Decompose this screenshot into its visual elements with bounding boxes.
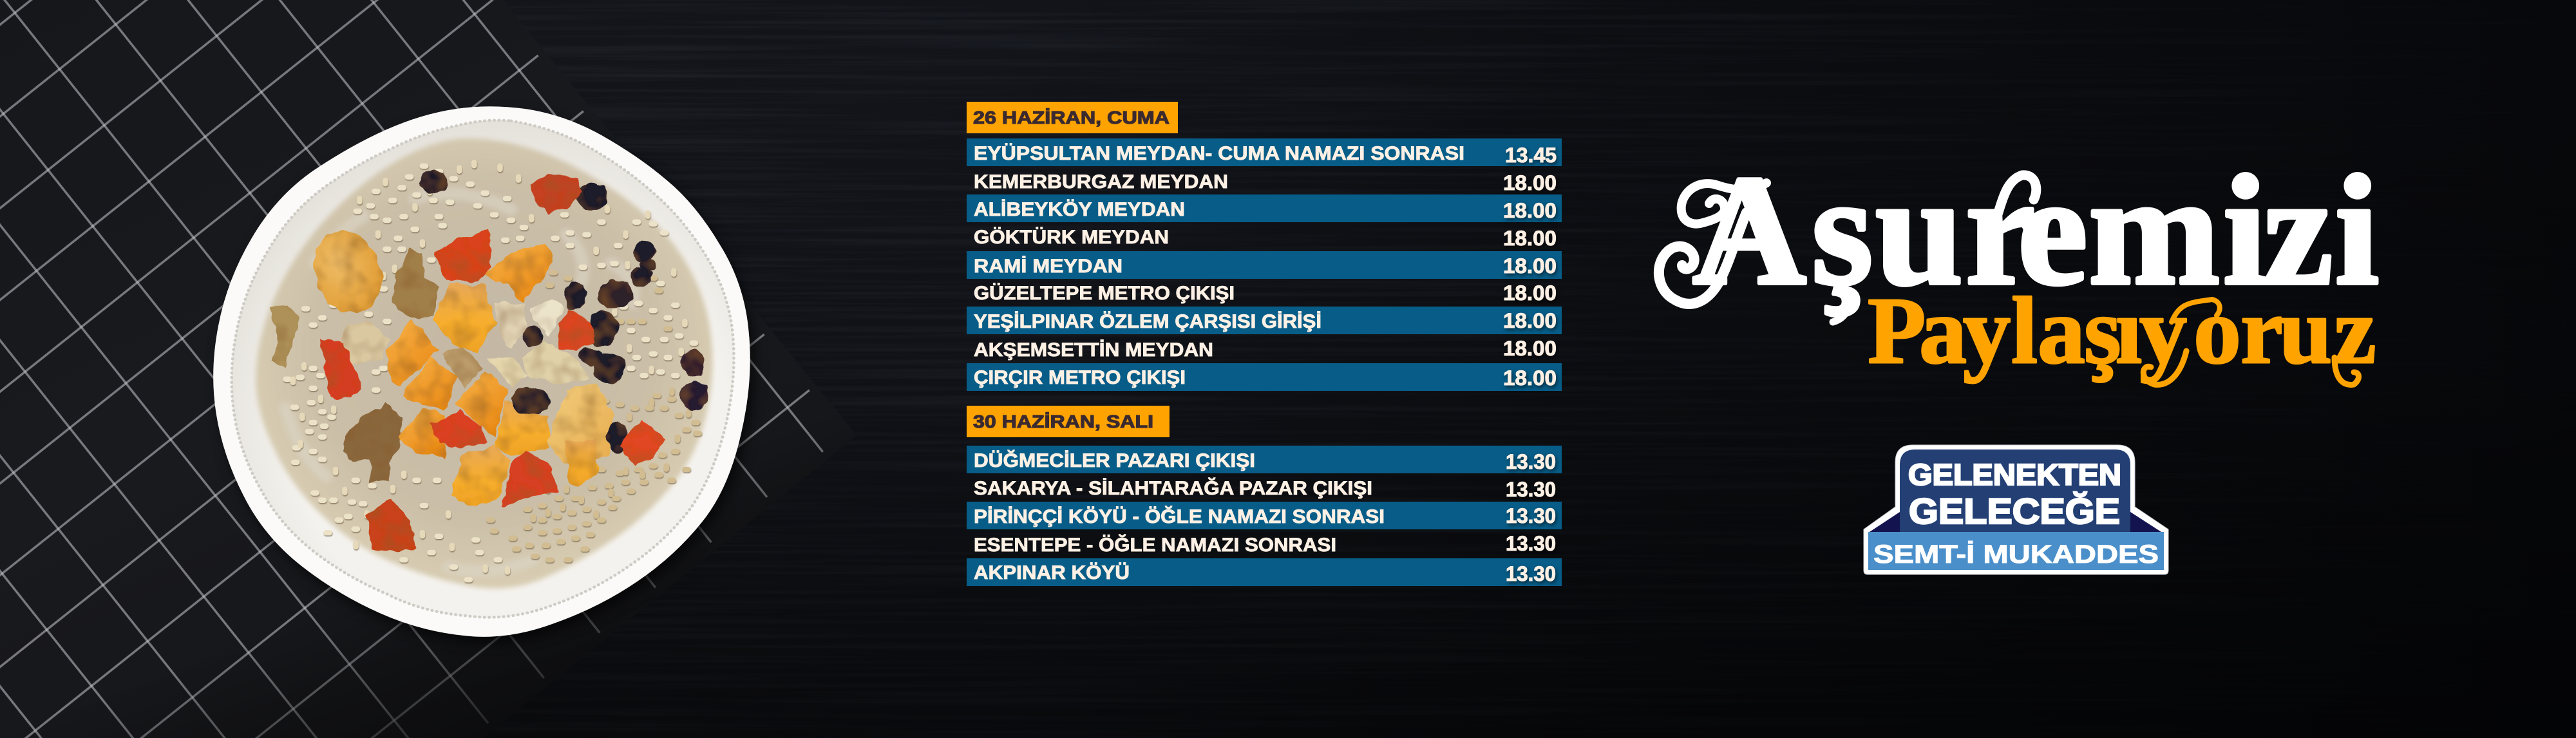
title: Paylaşıyoruz: Paylaşıyoruz [1868, 278, 2376, 384]
row: Akşemsettin: AKŞEMSETTİN MEYDAN [974, 339, 1213, 361]
row: Güzeltepe [974, 281, 1557, 305]
heading: 30 Haziran, Salı [967, 406, 1170, 437]
row: Çırçır: ÇIRÇIR METRO ÇIKIŞI [974, 367, 1186, 388]
row: Pirinççi: PİRİNÇÇİ KÖYÜ - ÖĞLE NAMAZI SONRASI [974, 506, 1385, 527]
row: Esentepe [974, 532, 1556, 556]
apricots [303, 222, 614, 506]
row: Düğmeciler: DÜĞMECİLER PAZARI ÇIKIŞI [974, 449, 1255, 471]
row: Eyüpsultan: EYÜPSULTAN MEYDAN- CUMA NAMAZI SONRASI [974, 143, 1464, 164]
row: Göktürk [974, 227, 1557, 250]
beaded inner rim [232, 120, 734, 618]
heading: 26 Haziran, Cuma: 26 HAZİRAN, CUMA [973, 108, 1170, 128]
row: Alibeyköy: ALİBEYKÖY MEYDAN [974, 199, 1185, 220]
row: Kemerburgaz: KEMERBURGAZ MEYDAN [974, 171, 1228, 193]
walnuts [270, 249, 591, 482]
row: Akpınar [967, 558, 1562, 586]
schedule: 30 Haziran [967, 406, 1562, 586]
row: Düğmeciler: 13.30 [1506, 450, 1556, 473]
schedule: 26 Haziran [967, 102, 1562, 391]
row: Esentepe: 13.30 [1506, 532, 1556, 555]
napkin: checked black cloth [0, 0, 863, 738]
row: Çırçır [967, 363, 1562, 391]
row: Kemerburgaz [974, 171, 1557, 194]
bowl of aşure [213, 106, 750, 637]
row: Güzeltepe: 18.00 [1503, 281, 1557, 305]
row: Esentepe: ESENTEPE - ÖĞLE NAMAZI SONRASI [974, 534, 1336, 556]
row: Akşemsettin: 18.00 [1503, 337, 1557, 360]
row: Göktürk: 18.00 [1503, 227, 1557, 250]
heading: 30 Haziran, Salı: 30 HAZİRAN, SALI [973, 412, 1153, 431]
porridge [256, 138, 712, 589]
logo: Gelenekten Geleceğe, Semt-i Mukaddes [1864, 445, 2168, 574]
row: Alibeyköy: 18.00 [1503, 199, 1557, 222]
logo: Gelenekten Geleceğe, Semt-i Mukaddes: GELENEKTEN [1908, 458, 2121, 491]
row: Sakarya: SAKARYA - SİLAHTARAĞA PAZAR ÇIKIŞI [974, 477, 1372, 499]
row: Rami: 18.00 [1503, 254, 1557, 278]
row: Alibeyköy [967, 194, 1562, 222]
row: Yeşilpınar: YEŞİLPINAR ÖZLEM ÇARŞISI GİRİŞİ [974, 311, 1321, 332]
row: Pirinççi [967, 502, 1562, 529]
row: Rami: RAMİ MEYDAN [974, 256, 1122, 277]
row: Eyüpsultan [967, 138, 1562, 167]
row: Pirinççi: 13.30 [1506, 504, 1556, 527]
row: Akpınar: AKPINAR KÖYÜ [974, 562, 1130, 583]
red dried fruit [320, 174, 667, 551]
raisins [420, 169, 708, 453]
row: Akpınar: 13.30 [1506, 562, 1556, 585]
heading: 26 Haziran, Cuma [967, 102, 1178, 133]
row: Eyüpsultan: 13.45 [1505, 144, 1557, 167]
toppings [270, 169, 708, 551]
row: Sakarya: 13.30 [1506, 478, 1556, 501]
row: Yeşilpınar: 18.00 [1503, 309, 1557, 332]
row: Sakarya [974, 477, 1556, 501]
row: Yeşilpınar [967, 307, 1562, 334]
sesame seeds [286, 162, 699, 580]
row: Rami [967, 251, 1562, 279]
row: Güzeltepe: GÜZELTEPE METRO ÇIKIŞI [974, 283, 1235, 304]
row: Akşemsettin [974, 337, 1557, 361]
logo badge shape [1864, 445, 2168, 574]
logo: Gelenekten Geleceğe, Semt-i Mukaddes: GELECEĞE [1909, 491, 2120, 531]
logo: Gelenekten Geleceğe, Semt-i Mukaddes: SEMT-İ MUKADDES [1873, 540, 2159, 569]
row: Çırçır: 18.00 [1503, 366, 1557, 390]
bowl rim [213, 106, 750, 637]
title: Aşuremizi: Aşuremizi [1692, 143, 2379, 317]
row: Düğmeciler [967, 446, 1562, 473]
row: Göktürk: GÖKTÜRK MEYDAN [974, 227, 1169, 248]
row: Kemerburgaz: 18.00 [1503, 171, 1557, 194]
